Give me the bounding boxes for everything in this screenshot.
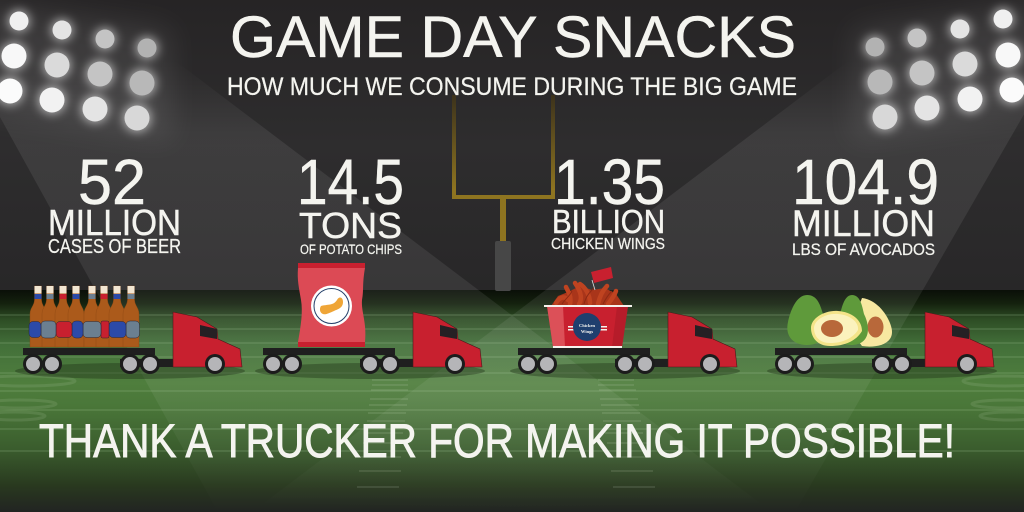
stadium backdrop	[0, 0, 1024, 291]
stat: beer: 52	[78, 146, 146, 218]
truck 2	[255, 312, 485, 379]
light haze	[0, 0, 1024, 140]
goal post	[452, 95, 555, 291]
stat: avocados	[792, 146, 939, 259]
stat: chips	[297, 146, 404, 257]
cargo: avocados	[787, 295, 892, 347]
stadium lights: left	[0, 10, 158, 132]
cargo: chicken wings bucket: Chicken	[579, 323, 595, 328]
title: GAME DAY SNACKS	[230, 5, 796, 70]
truck 1	[15, 312, 245, 379]
stat: wings: CHICKEN WINGS	[551, 236, 665, 253]
truck 4	[767, 312, 997, 379]
cargo: potato chip bag	[298, 263, 365, 347]
light beam: left	[0, 50, 760, 512]
subtitle: HOW MUCH WE CONSUME DURING THE BIG GAME	[227, 73, 797, 101]
stat: avocados: LBS OF AVOCADOS	[792, 241, 935, 259]
stat: chips: 14.5	[297, 146, 404, 218]
field yard lines	[0, 315, 1024, 451]
stat: beer: MILLION	[48, 202, 181, 243]
stat: wings: BILLION	[552, 203, 665, 240]
cargo: beer bottles	[29, 286, 140, 347]
stat: beer: CASES OF BEER	[48, 235, 181, 258]
stat: avocados: MILLION	[792, 203, 935, 244]
light beam: right	[264, 50, 1024, 512]
field numbers	[0, 376, 1024, 420]
stat: avocados: 104.9	[792, 146, 939, 218]
football field	[0, 290, 1024, 512]
stat: wings: 1.35	[554, 146, 665, 218]
stat: chips: OF POTATO CHIPS	[300, 242, 402, 257]
stat: wings	[551, 146, 665, 253]
stadium lights: right	[864, 8, 1024, 131]
truck 3	[510, 312, 740, 379]
hash marks	[357, 379, 655, 488]
stat: beer	[48, 146, 181, 258]
cargo: chicken wings bucket: Wings	[581, 329, 593, 334]
cargo: chicken wings bucket	[544, 267, 632, 348]
stat: chips: TONS	[299, 205, 402, 246]
